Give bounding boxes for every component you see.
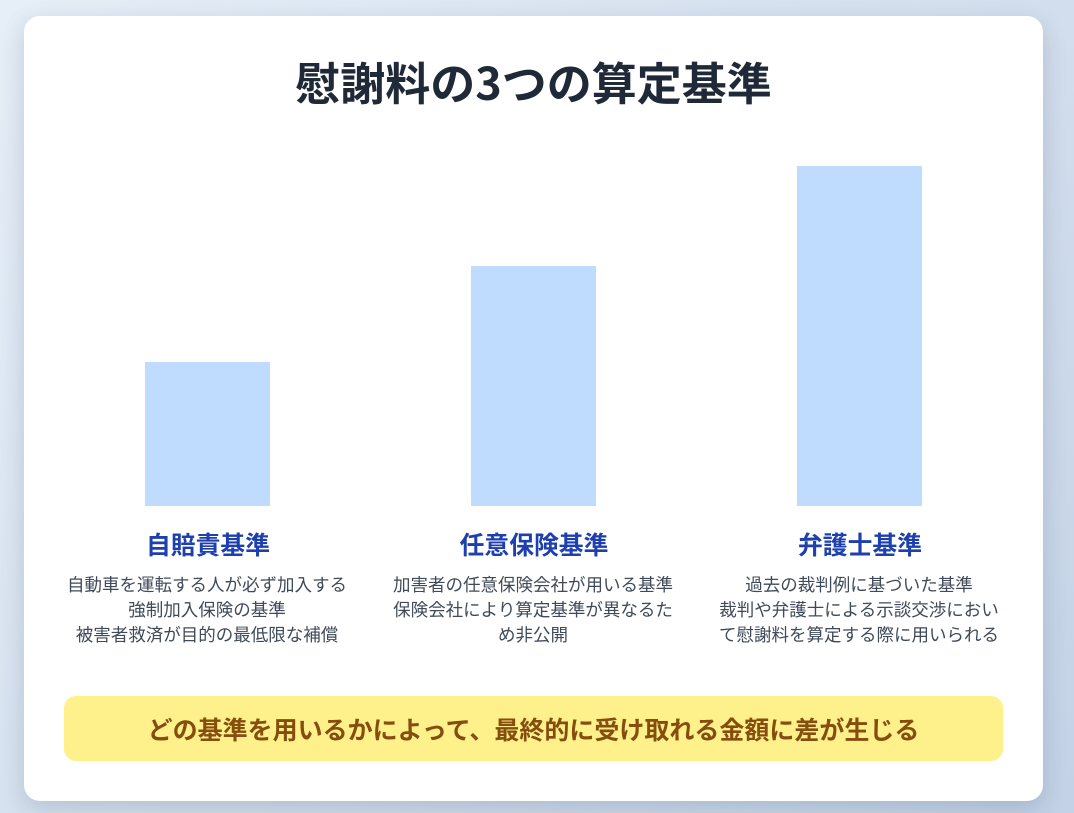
- description: 弁護士基準: 裁判や弁護士による示談交渉におい: [719, 597, 999, 622]
- bar: 自賠責基準: [145, 362, 270, 506]
- description: 自賠責基準: 強制加入保険の基準: [128, 597, 286, 622]
- label: 自賠責基準: 自賠責基準: [146, 526, 270, 562]
- description: 自賠責基準: [67, 572, 347, 647]
- title: 慰謝料の3つの算定基準: [295, 48, 772, 113]
- description: 弁護士基準: 過去の裁判例に基づいた基準: [745, 572, 973, 597]
- description: 自賠責基準: 被害者救済が目的の最低限な補償: [76, 622, 338, 647]
- callout banner: どの基準を用いるかによって、最終的に受け取れる金額に差が生じる: [148, 711, 919, 747]
- bar: 任意保険基準: [471, 266, 596, 506]
- description: 弁護士基準: て慰謝料を算定する際に用いられる: [719, 622, 999, 647]
- description: 任意保険基準: め非公開: [498, 622, 568, 647]
- label: 弁護士基準: 弁護士基準: [798, 526, 922, 562]
- description: 任意保険基準: 保険会社により算定基準が異なるた: [393, 597, 673, 622]
- description: 任意保険基準: 加害者の任意保険会社が用いる基準: [393, 572, 673, 597]
- description: 弁護士基準: [719, 572, 999, 647]
- bar: 弁護士基準: [797, 166, 922, 506]
- callout banner: [64, 696, 1003, 761]
- description: 任意保険基準: [393, 572, 673, 647]
- description: 自賠責基準: 自動車を運転する人が必ず加入する: [67, 572, 347, 597]
- label: 任意保険基準: 任意保険基準: [460, 526, 608, 562]
